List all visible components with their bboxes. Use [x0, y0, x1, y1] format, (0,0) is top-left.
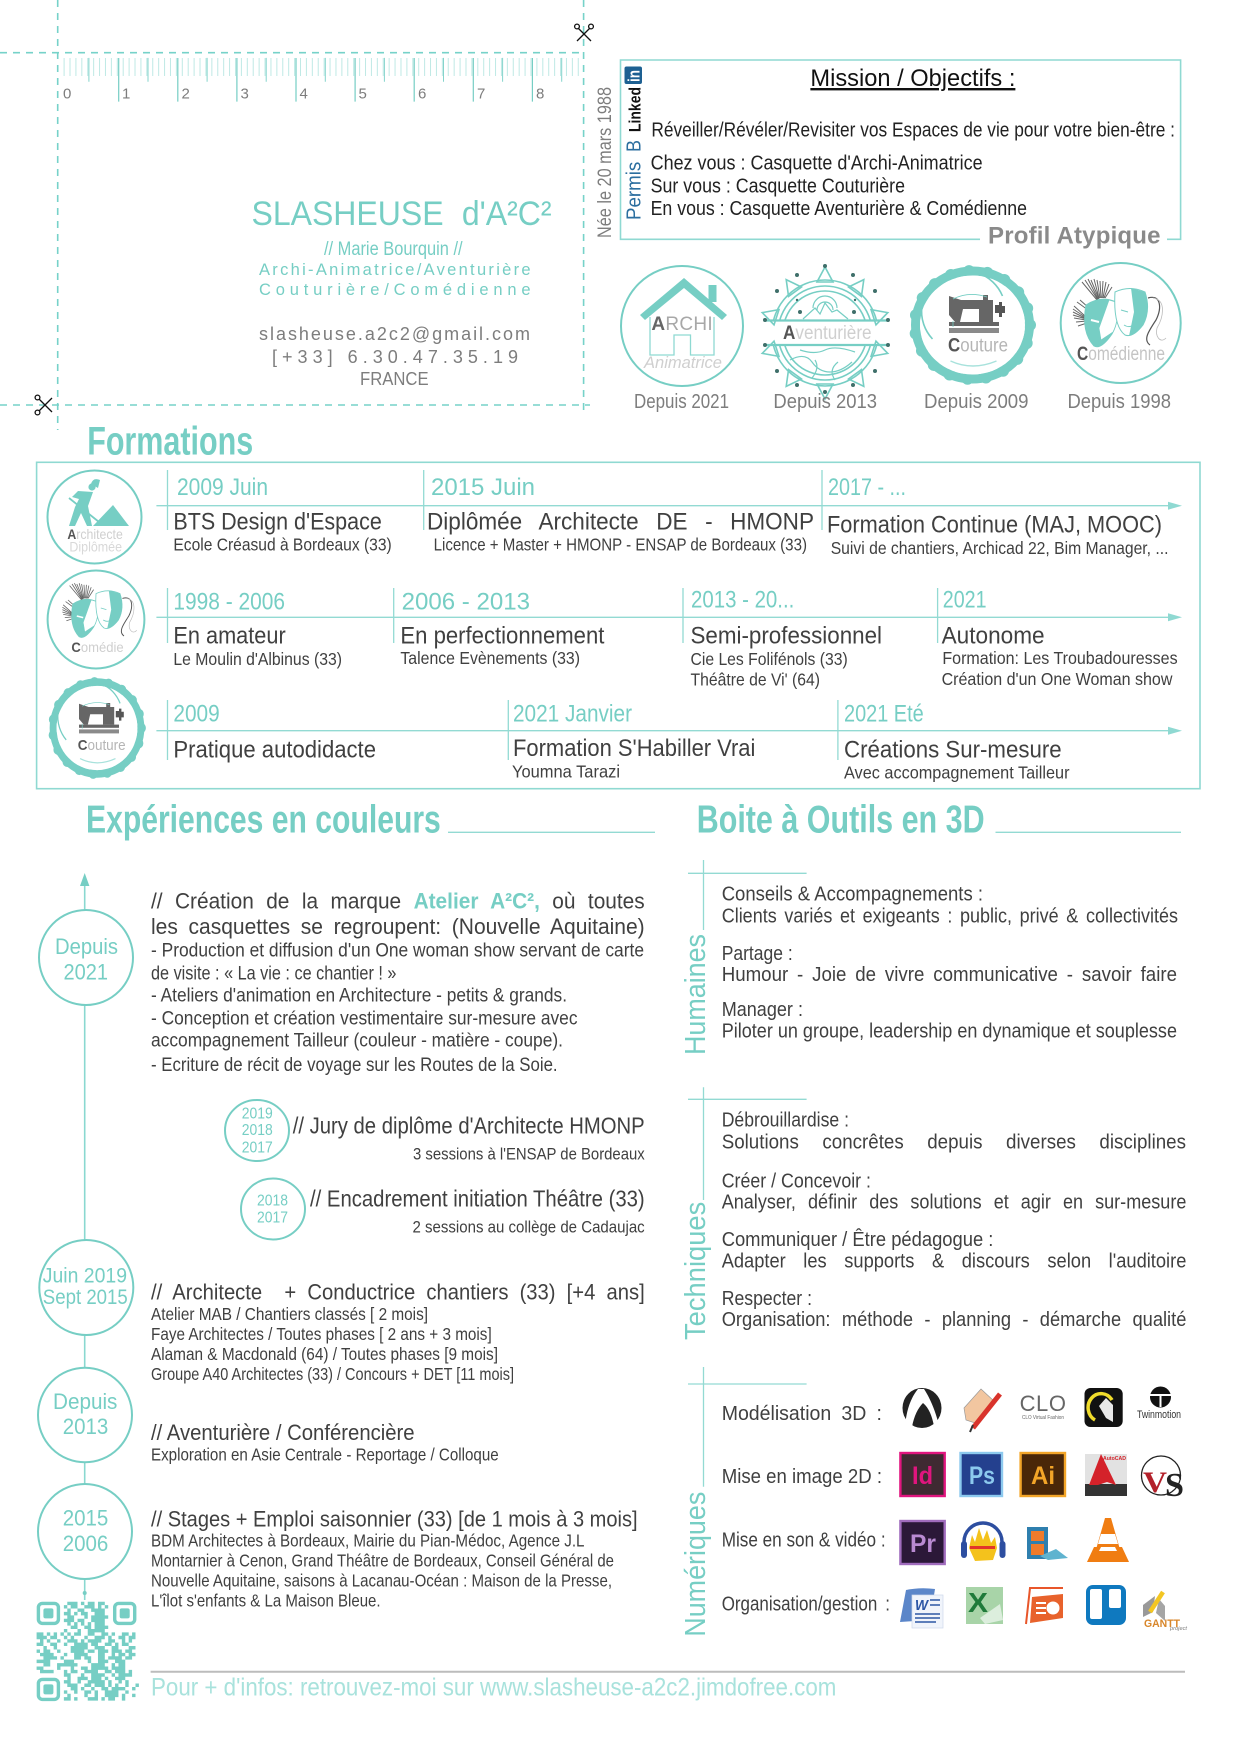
timeline row: architecture: Diplômée Architecte DE - HMONP [427, 508, 814, 535]
icons: sound and video [900, 1518, 1129, 1564]
skills: techniques: Analyser, définir des solutions et agir en sur-mesure [722, 1190, 1186, 1213]
skills: numeriques: Mise en image 2D : [722, 1465, 882, 1488]
timeline row: comedie: En amateur [173, 622, 286, 649]
skills: techniques: Respecter : [722, 1287, 812, 1310]
icon: word [900, 1588, 943, 1628]
icon: photoshop [960, 1453, 1002, 1496]
timeline axis [80, 873, 89, 1600]
badge: couture [915, 270, 1030, 413]
identity block [252, 195, 552, 389]
heading: formations: Formations [87, 420, 253, 464]
skills: techniques: Débrouillardise : [722, 1109, 849, 1132]
icon: scissors bottom left [35, 395, 52, 415]
date circle: 2019-2017: 2018 [242, 1122, 273, 1139]
icon: photoshop: Ps [969, 1462, 995, 1490]
timeline row: comedie: Théâtre de Vi' (64) [690, 670, 820, 690]
icon: architect worker: Architecte [67, 526, 123, 542]
skills: techniques: Communiquer / Être pédagogue : [722, 1228, 993, 1251]
icon: twinmotion: Twinmotion [1137, 1409, 1181, 1421]
timeline row: architecture [48, 470, 1182, 564]
experience: architect: Faye Architectes / Toutes phases [ 2 ans + 3 mois] [151, 1324, 492, 1344]
icon: premiere [900, 1521, 945, 1564]
mission text [651, 120, 1175, 220]
experience: theatre [310, 1186, 645, 1237]
skills: techniques: Adapter les supports & discours selon l'auditoire [722, 1249, 1186, 1272]
date circle: 2015-2006 [38, 1484, 132, 1579]
skills: humaines: Humour - Joie de vivre communicative - savoir faire [722, 963, 1177, 986]
date circle: 2018-2017: 2017 [257, 1210, 288, 1227]
badge: aventuriere [760, 264, 890, 413]
date circle: 2018-2017: 2018 [257, 1193, 288, 1210]
icons: organisation [900, 1585, 1188, 1632]
mission text: Sur vous : Casquette Couturière [651, 176, 905, 198]
skills: humaines: Piloter un groupe, leadership en dynamique et souplesse [722, 1019, 1177, 1042]
timeline row: couture: Créations Sur-mesure [844, 736, 1062, 763]
panel: formations [37, 462, 1200, 789]
driving licence and LinkedIn: B [624, 140, 646, 152]
badge: comedienne [1061, 263, 1181, 413]
timeline row: architecture: Ecole Créasud à Bordeaux (33) [173, 535, 392, 555]
experience: architect: Alaman & Macdonald (64) / Toutes phases [9 mois] [151, 1344, 498, 1364]
date circle: depuis 2013 [38, 1368, 132, 1462]
icon: autocad [1085, 1454, 1127, 1496]
ruler: 2 [182, 86, 190, 102]
skills: numeriques: Organisation/gestion : [722, 1593, 890, 1616]
mission text: Chez vous : Casquette d'Archi-Animatrice [651, 152, 983, 174]
experience: adventurer: // Aventurière / Conférencière [151, 1420, 415, 1445]
badge: aventuriere: Aventurière [783, 323, 872, 344]
timeline row: couture: 2009 [173, 701, 220, 728]
date circle: 2019-2015: Sept 2015 [43, 1286, 128, 1309]
icon: indesign: Id [912, 1462, 933, 1490]
date circle: 2018-2017 [241, 1178, 305, 1240]
timeline row: comedie: 2013 - 20... [691, 586, 794, 613]
experience: internships: Montarnier à Cenon, Grand Théâtre de Bordeaux, Conseil Général de [151, 1551, 614, 1571]
birth date vertical: Née le 20 mars 1988 [595, 87, 616, 238]
icon: autocad: AutoCAD [1103, 1456, 1126, 1462]
timeline row: architecture: 2009 Juin [177, 474, 268, 501]
timeline row: couture: Pratique autodidacte [173, 736, 376, 763]
experience: atelier: les casquettes se regroupent: (Nouvelle Aquitaine) [151, 914, 645, 939]
experience: architect [151, 1279, 645, 1384]
icon: excel: X [968, 1587, 988, 1618]
experience: atelier: - Ateliers d'animation en Architecture - petits & grands. [151, 986, 567, 1007]
skills: techniques: Créer / Concevoir : [722, 1169, 871, 1192]
timeline row: architecture: Licence + Master + HMONP - ENSAP de Bordeaux (33) [434, 535, 807, 555]
badge: architecture [621, 266, 743, 413]
ruler: 4 [300, 86, 308, 102]
icon: sewing badge: Couture [78, 737, 126, 754]
ruler [63, 67, 583, 102]
contact details: slasheuse.a2c2@gmail.com [259, 324, 530, 344]
icon: gantt project: project [1169, 1626, 1188, 1632]
date circle: depuis 2021 [39, 910, 133, 1005]
ruler: 3 [240, 86, 249, 102]
icon: VS [1142, 1456, 1184, 1504]
experience: internships: Nouvelle Aquitaine, saisons à Lacanau-Océan : Maison de la Presse, [151, 1571, 612, 1591]
timeline row: couture: Youmna Tarazi [512, 762, 620, 782]
timeline row: architecture: BTS Design d'Espace [173, 508, 382, 535]
icon: CLO: CLO Virtual Fashion [1022, 1415, 1064, 1421]
badge: comedienne: Depuis 1998 [1068, 391, 1171, 413]
experience: adventurer: Exploration en Asie Centrale - Reportage / Colloque [151, 1445, 499, 1465]
roles: Archi-Animatrice/Aventurière [259, 261, 531, 279]
icon: movie maker [1027, 1527, 1068, 1560]
icons: 2D image [900, 1453, 1184, 1504]
icon: excel [966, 1587, 1003, 1624]
date circle: 2019-2015 [39, 1240, 133, 1335]
contact details: FRANCE [360, 369, 429, 389]
ruler: 7 [477, 86, 485, 102]
date circle: 2019-2017: 2019 [242, 1105, 273, 1122]
ruler: 6 [418, 86, 426, 102]
panel: mission [620, 60, 1181, 249]
contact details [259, 324, 530, 389]
experience: internships: // Stages + Emploi saisonnier (33) [de 1 mois à 3 mois] [151, 1507, 638, 1532]
timeline row: comedie: Autonome [942, 622, 1045, 649]
icon: sewing badge [53, 682, 141, 774]
icon: archicad [902, 1388, 942, 1428]
date circle: 2019-2017: 2017 [242, 1139, 273, 1156]
profile label: Profil Atypique [988, 222, 1160, 249]
date circle: depuis 2013: Depuis [53, 1389, 117, 1414]
experience: jury: 3 sessions à l'ENSAP de Bordeaux [413, 1144, 645, 1163]
date circle: 2015-2006: 2015 [63, 1506, 108, 1531]
experience: atelier: accompagnement Tailleur (couleur - matière - coupe). [151, 1031, 563, 1052]
experience: internships [151, 1507, 638, 1611]
timeline row: couture: 2021 Janvier [513, 701, 632, 728]
timeline row: comedie: Talence Evènements (33) [400, 648, 580, 668]
icon: gantt project [1143, 1592, 1188, 1632]
name title: SLASHEUSE d'A²C² [252, 195, 552, 233]
roles: Couturière/Comédienne [259, 281, 531, 299]
timeline row: couture [53, 682, 1182, 782]
badge: architecture: ARCHI [651, 314, 713, 335]
icon: VS: V [1143, 1466, 1167, 1499]
timeline row: comedie: 2006 - 2013 [402, 588, 530, 615]
contact details: [+33] 6.30.47.35.19 [272, 347, 518, 367]
badge: architecture: Animatrice [643, 353, 722, 372]
date circle: depuis 2021: 2021 [64, 959, 108, 984]
date circle: 2015-2006: 2006 [63, 1531, 108, 1556]
icon: premiere: Pr [910, 1530, 936, 1558]
badge: couture: Couture [948, 336, 1008, 357]
skills: techniques: Organisation: méthode - planning - démarche qualité [722, 1308, 1186, 1331]
icon: comedy masks: Comédie [71, 639, 124, 655]
badge: aventuriere: Depuis 2013 [773, 391, 877, 413]
icon: scissors top right [575, 24, 593, 41]
timeline row: comedie: Cie Les Folifénols (33) [690, 649, 848, 669]
skills: humaines: Manager : [722, 998, 803, 1021]
date circle: depuis 2013: 2013 [63, 1414, 108, 1439]
ruler: 5 [358, 86, 367, 102]
timeline row: comedie: En perfectionnement [400, 622, 605, 649]
timeline row: comedie [48, 570, 1182, 690]
icon: trello [1086, 1585, 1126, 1625]
experience: atelier: // Création de la marque Atelier A²C², où toutes [151, 888, 645, 913]
mission text: En vous : Casquette Aventurière & Comédienne [651, 198, 1027, 220]
person name: // Marie Bourquin // [324, 239, 463, 260]
mission text: Réveiller/Révéler/Revisiter vos Espaces de vie pour votre bien-être : [651, 120, 1175, 142]
experience: architect: // Architecte + Conductrice chantiers (33) [+4 ans] [151, 1279, 645, 1304]
icon: CLO: CLO [1020, 1391, 1066, 1416]
experience: atelier: - Conception et création vestimentaire sur-mesure avec [151, 1008, 578, 1029]
experience: atelier: - Ecriture de récit de voyage sur les Routes de la Soie. [151, 1055, 558, 1076]
icon: illustrator [1021, 1453, 1065, 1496]
mission heading: Mission / Objectifs : [810, 65, 1015, 92]
business card cut lines [0, 0, 590, 430]
skills: numeriques [680, 1367, 1188, 1637]
ruler: 0 [63, 86, 71, 102]
skills: techniques: Techniques [680, 1202, 712, 1340]
icon: audacity [961, 1523, 1006, 1561]
skills: techniques [680, 1087, 1186, 1340]
timeline row: architecture: 2017 - ... [828, 474, 906, 501]
skills: humaines: Clients variés et exigeants : public, privé & collectivités [722, 904, 1178, 927]
experience: atelier [151, 888, 645, 1076]
icon: architect worker: Diplômée [69, 539, 122, 555]
timeline row: comedie: Le Moulin d'Albinus (33) [173, 649, 342, 669]
date circle: depuis 2021: Depuis [55, 934, 118, 959]
icon: twinmotion [1137, 1386, 1181, 1421]
timeline row: couture: 2021 Eté [844, 701, 924, 728]
icon: illustrator: Ai [1031, 1462, 1055, 1490]
icon: vlc [1087, 1518, 1129, 1562]
date circle: 2019-2015: Juin 2019 [43, 1264, 127, 1287]
experience: internships: BDM Architectes à Bordeaux, Mairie du Pian-Médoc, Agence J.L [151, 1531, 585, 1551]
skills: humaines: Conseils & Accompagnements : [722, 883, 983, 906]
icon: VS: S [1165, 1467, 1184, 1504]
timeline row: comedie: 1998 - 2006 [173, 588, 285, 615]
roles [259, 261, 531, 299]
skills: numeriques: Modélisation 3D : [722, 1402, 882, 1425]
badge: architecture: Depuis 2021 [634, 391, 729, 413]
heading: toolbox: Boite à Outils en 3D [697, 798, 985, 842]
experience: jury: // Jury de diplôme d'Architecte HMONP [293, 1112, 645, 1138]
timeline row: couture: Avec accompagnement Tailleur [844, 762, 1070, 782]
experience: jury [293, 1112, 645, 1163]
skills: techniques: Solutions concrêtes depuis diverses disciplines [722, 1130, 1186, 1153]
badge: couture: Depuis 2009 [924, 391, 1028, 413]
icon: gantt project: GANTT [1144, 1618, 1180, 1630]
QR code [37, 1603, 139, 1699]
experience: adventurer [151, 1420, 499, 1465]
driving licence and LinkedIn: Permis [624, 162, 646, 220]
timeline row: comedie: Formation: Les Troubadouresses [942, 648, 1178, 668]
experience: internships: L'îlot s'enfants & La Maison Bleue. [151, 1591, 381, 1611]
skills: humaines: Humaines [680, 934, 712, 1055]
skills: numeriques: Numériques [680, 1492, 712, 1637]
ruler: 8 [536, 86, 544, 102]
timeline row: comedie: Semi-professionnel [690, 622, 882, 649]
experience: theatre: // Encadrement initiation Théâtre (33) [310, 1186, 645, 1212]
skills: humaines [680, 860, 1178, 1055]
icons: 3D modelling [902, 1386, 1181, 1432]
footer line and website: Pour + d'infos: retrouvez-moi sur www.slasheuse-a2c2.jimdofree.com [151, 1674, 836, 1702]
timeline row: comedie: Création d'un One Woman show [942, 669, 1173, 689]
badge: comedienne: Comédienne [1077, 344, 1165, 365]
experience: atelier: de visite : « La vie : ce chantier ! » [151, 963, 396, 984]
experience: atelier: - Production et diffusion d'un One woman show servant de carte [151, 941, 644, 962]
driving licence and LinkedIn [624, 66, 646, 220]
driving licence and LinkedIn: in [624, 70, 644, 82]
icon: comedy masks [48, 570, 144, 668]
icon: indesign [900, 1453, 945, 1496]
experience: architect: Groupe A40 Architectes (33) / Concours + DET [11 mois] [151, 1364, 514, 1384]
experience: architect: Atelier MAB / Chantiers classés [ 2 mois] [151, 1304, 428, 1324]
timeline row: couture: Formation S'Habiller Vrai [513, 735, 755, 762]
icon: sketchup [964, 1389, 1000, 1432]
icon: powerpoint [1026, 1588, 1063, 1624]
icon: word: W [915, 1597, 930, 1614]
skills: numeriques: Mise en son & vidéo : [722, 1529, 886, 1552]
icon: architect worker [48, 470, 142, 564]
timeline row: architecture: 2015 Juin [431, 474, 535, 501]
heading: experiences: Expériences en couleurs [86, 798, 441, 842]
experience: theatre: 2 sessions au collège de Cadaujac [412, 1218, 645, 1237]
timeline row: architecture: Formation Continue (MAJ, MOOC) [827, 512, 1162, 539]
driving licence and LinkedIn: Linked [626, 87, 645, 132]
timeline row: architecture: Suivi de chantiers, Archicad 22, Bim Manager, ... [831, 538, 1168, 558]
timeline row: comedie: 2021 [943, 586, 986, 613]
ruler: 1 [122, 86, 130, 102]
icon: rhino [1084, 1388, 1123, 1427]
skills: humaines: Partage : [722, 942, 793, 965]
date circle: 2019-2017 [225, 1100, 289, 1161]
